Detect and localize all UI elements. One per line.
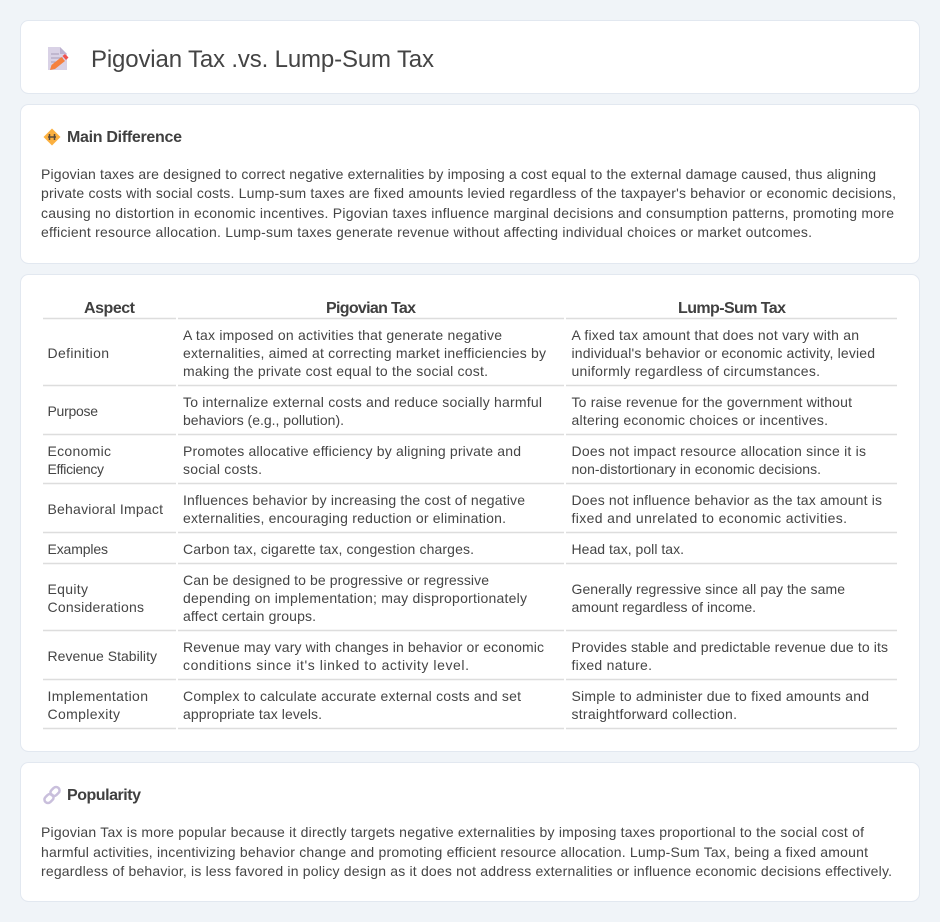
icon: link (43, 785, 61, 805)
row: definition: individual's behavior or economic activity, levied (572, 345, 875, 361)
row: revenue stability: fixed nature. (572, 657, 652, 673)
row: examples: Carbon tax, cigarette tax, congestion charges. (183, 541, 474, 557)
row: equity considerations: depending on implementation; may disproportionately (183, 590, 527, 606)
row: definition (48, 327, 875, 379)
text block: popularity (41, 824, 892, 879)
row: behavioral impact: fixed and unrelated to economic activities. (572, 510, 847, 526)
row: equity considerations: amount regardless of income. (572, 599, 756, 615)
row: implementation complexity: appropriate tax levels. (183, 706, 322, 722)
text block: popularity: harmful activities, incentivizing behavior change and promoting efficient resource allocation. Lump-Sum Tax, being a fixed amount (41, 844, 868, 860)
row: behavioral impact (48, 492, 882, 526)
row: equity considerations: Equity (48, 581, 88, 597)
row: economic efficiency: social costs. (183, 461, 262, 477)
row: behavioral impact: externalities, encouraging reduction or elimination. (183, 510, 506, 526)
row: definition: A fixed tax amount that does not vary with an (572, 327, 859, 343)
row: equity considerations: Considerations (48, 599, 144, 615)
row: revenue stability: conditions since it's linked to activity level. (183, 657, 469, 673)
row: equity considerations (48, 572, 845, 624)
table header row: Aspect (84, 300, 136, 317)
row: purpose: altering economic choices or incentives. (572, 412, 828, 428)
row: behavioral impact: Does not influence behavior as the tax amount is (572, 492, 882, 508)
row: examples (48, 541, 684, 557)
row: behavioral impact: Behavioral Impact (48, 501, 163, 517)
row: implementation complexity: Simple to administer due to fixed amounts and (572, 688, 869, 704)
heading: popularity: Popularity (67, 787, 141, 804)
row: examples: Examples (48, 541, 108, 557)
row: implementation complexity: Complex to calculate accurate external costs and set (183, 688, 521, 704)
panel: comparison table (20, 274, 920, 752)
row: purpose (48, 394, 852, 428)
text block: main difference: efficient resource allocation. Lump-sum taxes generate revenue without affecting individual choices or market outcomes. (41, 224, 812, 240)
text block: main difference: Pigovian taxes are designed to correct negative externalities by imposing a cost equal to the external damage caused, thus aligning (41, 166, 876, 182)
text block: main difference: private costs with social costs. Lump-sum taxes are fixed amounts levied regardless of the taxpayer's behavior or economic decisions, (41, 185, 896, 201)
text block: main difference: causing no distortion in economic incentives. Pigovian taxes influence marginal decisions and consumption patterns, promoting more (41, 205, 894, 221)
row: revenue stability: Revenue may vary with changes in behavior or economic (183, 639, 544, 655)
row: behavioral impact: Influences behavior by increasing the cost of negative (183, 492, 525, 508)
title: Pigovian Tax .vs. Lump-Sum Tax (91, 46, 434, 73)
table header row: Pigovian Tax (326, 300, 416, 317)
row: definition: making the private cost equal to the social cost. (183, 363, 488, 379)
row: implementation complexity: straightforward collection. (572, 706, 737, 722)
panel: header (20, 20, 920, 94)
row: revenue stability (48, 639, 888, 673)
row: economic efficiency (48, 443, 866, 477)
row: definition: A tax imposed on activities that generate negative (183, 327, 502, 343)
text block: popularity: regardless of behavior, is less favored in policy design as it does not address externalities or influence economic decisions effectively. (41, 863, 892, 879)
row: economic efficiency: non-distortionary in economic decisions. (572, 461, 821, 477)
row: examples: Head tax, poll tax. (572, 541, 684, 557)
row: equity considerations: affect certain groups. (183, 608, 316, 624)
icon: warning diamond (44, 128, 60, 146)
row: implementation complexity: Implementation (48, 688, 148, 704)
panel: main difference (20, 104, 920, 264)
row: purpose: To raise revenue for the government without (572, 394, 852, 410)
row: purpose: To internalize external costs and reduce socially harmful (183, 394, 542, 410)
row: economic efficiency: Does not impact resource allocation since it is (572, 443, 866, 459)
row: economic efficiency: Promotes allocative efficiency by aligning private and (183, 443, 521, 459)
row: purpose: behaviors (e.g., pollution). (183, 412, 344, 428)
row: purpose: Purpose (48, 403, 98, 419)
text block: popularity: Pigovian Tax is more popular because it directly targets negative externalities by imposing taxes proportional to the social cost of (41, 824, 864, 840)
row: economic efficiency: Efficiency (48, 461, 104, 477)
row: definition: Definition (48, 345, 109, 361)
panel: popularity (20, 762, 920, 902)
row: revenue stability: Provides stable and predictable revenue due to its (572, 639, 888, 655)
table header row: Lump-Sum Tax (678, 300, 786, 317)
icon: document with pencil (48, 47, 68, 70)
row: implementation complexity (48, 688, 869, 722)
row: definition: uniformly regardless of circumstances. (572, 363, 820, 379)
row: equity considerations: Can be designed to be progressive or regressive (183, 572, 489, 588)
heading: main difference: Main Difference (67, 129, 182, 146)
row: revenue stability: Revenue Stability (48, 648, 157, 664)
row: equity considerations: Generally regressive since all pay the same (572, 581, 845, 597)
row: economic efficiency: Economic (48, 443, 111, 459)
row: definition: externalities, aimed at correcting market inefficiencies by (183, 345, 546, 361)
table header row (84, 300, 786, 317)
row: implementation complexity: Complexity (48, 706, 120, 722)
text block: main difference (41, 166, 896, 240)
